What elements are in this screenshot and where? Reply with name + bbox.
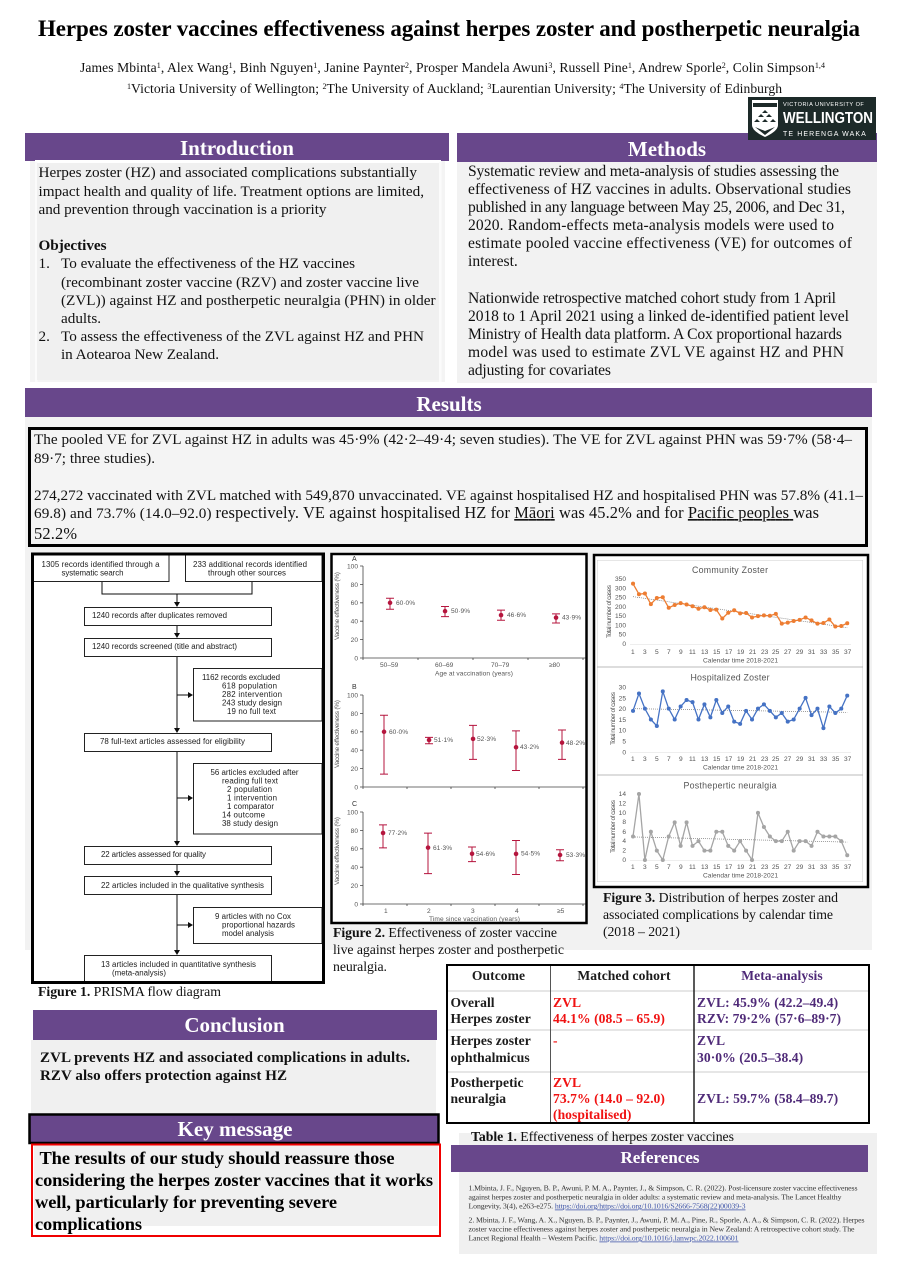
chart: postherpetic neuralgia: 8 — [622, 819, 626, 826]
chart: postherpetic neuralgia: 37 — [844, 864, 852, 871]
chart: community zoster: 350 — [615, 576, 626, 583]
text: methods: interest. — [468, 253, 518, 270]
icon: shield — [752, 100, 778, 137]
chart: community zoster: Calendar time 2018-2021 — [703, 658, 778, 664]
chart B: by time since vaccination — [334, 684, 586, 792]
text: methods: effectiveness of HZ vaccines in adults. Observational studies — [468, 181, 851, 198]
chart B: by time since vaccination: Vaccine effectiveness (%) — [334, 700, 341, 768]
chart: postherpetic neuralgia: 17 — [725, 864, 733, 871]
chart: community zoster: Total number of cases — [606, 584, 613, 638]
text: introduction: Herpes zoster (HZ) and associated complications substantially — [38, 164, 417, 181]
heading: results — [25, 388, 872, 417]
chart: hospitalized zoster: 15 — [619, 717, 626, 724]
text: methods: adjusting for covariates — [468, 362, 611, 379]
chart C: postherpetic neuralgia: 20 — [351, 883, 358, 890]
chart: community zoster: 300 — [615, 586, 626, 592]
affiliations: Victoria University of Wellington; — [131, 81, 322, 96]
text: introduction: Objectives — [38, 237, 107, 254]
chart C: postherpetic neuralgia: 60 — [351, 846, 358, 853]
chart A: by age at vaccination: 60·0% — [396, 600, 415, 607]
authors: , Prosper Mandela Awuni — [409, 60, 549, 75]
chart: community zoster: 100 — [615, 622, 626, 630]
caption: figure 3 — [603, 890, 838, 940]
panel: key message: well, particularly for preventing severe — [35, 1192, 337, 1212]
caption: figure 3: (2018 – 2021) — [603, 924, 680, 940]
text: introduction: To evaluate the effectiveness of the HZ vaccines — [61, 255, 355, 272]
authors: James Mbinta — [80, 60, 157, 75]
chart: postherpetic neuralgia: 31 — [808, 864, 816, 871]
figure 1: PRISMA flow diagram: 1 comparator — [227, 802, 274, 811]
text: conclusion: RZV also offers protection against HZ — [40, 1068, 287, 1084]
chart: hospitalized zoster: 5 — [655, 756, 659, 763]
chart: community zoster: 5 — [655, 649, 659, 656]
chart A: by age at vaccination: 43·9% — [562, 614, 581, 622]
chart: community zoster: 3 — [643, 649, 647, 656]
table: effectiveness of vaccines: RZV: 79·2% (57·6–89·7) — [697, 1011, 841, 1027]
chart: hospitalized zoster: 37 — [844, 756, 852, 763]
chart: postherpetic neuralgia: 27 — [784, 864, 792, 871]
logo: Victoria University of Wellington: WELLINGTON — [783, 110, 873, 127]
caption: figure 3: associated complications by calendar time — [603, 907, 833, 922]
panel: conclusion — [31, 1010, 437, 1114]
table: effectiveness of vaccines: Matched cohort — [577, 968, 671, 983]
authors: , Binh Nguyen — [233, 60, 313, 75]
figure 1: PRISMA flow diagram: 22 articles assessed for quality — [101, 850, 206, 859]
authors: 1 — [229, 61, 233, 70]
text: methods: estimate pooled vaccine effectiveness (VE) for outcomes of — [468, 235, 853, 252]
chart: postherpetic neuralgia: 29 — [796, 864, 804, 871]
chart A: by age at vaccination: 70–79 — [491, 662, 510, 669]
chart: hospitalized zoster: 35 — [832, 756, 840, 763]
logo: Victoria University of Wellington: TE HERENGA WAKA — [783, 131, 867, 138]
chart: postherpetic neuralgia: 12 — [619, 800, 626, 808]
chart: hospitalized zoster: 30 — [619, 684, 626, 692]
figure 2: vaccine effectiveness plots — [332, 554, 586, 923]
chart: postherpetic neuralgia: 35 — [832, 864, 840, 871]
chart: community zoster: 25 — [772, 649, 780, 656]
text: methods — [468, 163, 853, 379]
chart: postherpetic neuralgia: 6 — [622, 829, 626, 836]
chart: hospitalized zoster: 19 — [737, 756, 745, 763]
table: effectiveness of vaccines: Outcome — [472, 968, 525, 983]
chart: community zoster: 31 — [808, 649, 816, 656]
table: effectiveness of vaccines: ZVL — [553, 995, 581, 1010]
chart: community zoster: 200 — [615, 604, 626, 611]
text: introduction: To assess the effectiveness of the ZVL against HZ and PHN — [61, 328, 424, 345]
figure 1: PRISMA flow diagram: 282 intervention — [222, 690, 282, 699]
caption: figure 2: Figure 2. Effectiveness of zoster vaccine — [333, 925, 557, 940]
figure 1: PRISMA flow diagram: 78 full-text articles assessed for eligibility — [100, 737, 245, 746]
panel: results summary: 89·7; three studies). — [34, 450, 155, 467]
caption: figure 2 — [333, 925, 564, 974]
chart: postherpetic neuralgia: 19 — [737, 864, 745, 871]
chart: hospitalized zoster: 1 — [631, 756, 635, 763]
authors: 2 — [722, 61, 726, 70]
table: effectiveness of vaccines: Herpes zoster — [450, 1033, 531, 1048]
chart B: by time since vaccination: 100 — [347, 692, 358, 700]
chart: hospitalized zoster: 10 — [619, 728, 626, 734]
panel: results summary — [30, 428, 866, 546]
chart C: postherpetic neuralgia: 54·5% — [521, 850, 540, 858]
chart: postherpetic neuralgia: 0 — [622, 857, 626, 864]
affiliations: 1 — [127, 82, 131, 91]
figure 1: PRISMA flow diagram: 1240 records after duplicates removed — [92, 611, 227, 620]
chart B: by time since vaccination: 60·0% — [389, 729, 408, 736]
text: references: 1.Mbinta, J. F., Nguyen, B. P., Awuni, P. M. A., Paynter, J., & Simpson, C. R. (2022). Post-licensure zoster vaccine effectiveness — [468, 1184, 858, 1192]
figure 1: PRISMA flow diagram: 22 articles included in the qualitative synthesis — [101, 881, 264, 890]
text: introduction: 2. — [38, 328, 50, 345]
chart: hospitalized zoster: 0 — [622, 750, 626, 756]
chart: community zoster: 17 — [725, 649, 733, 656]
text: methods: Ministry of Health data platform. A Cox proportional hazards — [468, 326, 842, 343]
chart: community zoster: 9 — [679, 649, 683, 656]
chart A: by age at vaccination — [334, 556, 586, 678]
chart: community zoster: 35 — [832, 649, 840, 656]
chart B: by time since vaccination: 40 — [351, 748, 358, 754]
chart: community zoster: 7 — [667, 649, 671, 656]
authors: 3 — [548, 61, 552, 70]
authors: 1 — [313, 61, 317, 70]
chart B: by time since vaccination: 48·2% — [566, 740, 585, 747]
heading: introduction: Introduction — [180, 136, 294, 160]
chart: hospitalized zoster: 27 — [784, 756, 792, 763]
chart: postherpetic neuralgia: 25 — [772, 864, 780, 871]
table: effectiveness of vaccines: Meta-analysis — [741, 968, 823, 983]
panel: methods — [457, 133, 877, 383]
figure 1: PRISMA flow diagram: 1305 records identified through a — [42, 560, 160, 569]
chart B: by time since vaccination: 43·2% — [520, 744, 539, 751]
heading: conclusion: Conclusion — [184, 1013, 285, 1037]
table: effectiveness of vaccines: Overall — [450, 995, 495, 1010]
figure 1: PRISMA flow diagram: 14 outcome — [222, 810, 266, 820]
text: references: Longevity, 3(4), e263-e275. https://doi.org/https://doi.org/10.1016/S2666-7568(22)00039-3 — [468, 1202, 746, 1210]
panel: results summary: The pooled VE for ZVL against HZ in adults was 45·9% (42·2–49·4; seven studies). The VE for ZVL against PHN was 59·7% (58·4– — [34, 431, 852, 448]
heading: introduction — [25, 133, 449, 162]
chart A: by age at vaccination: 80 — [351, 582, 358, 589]
text: introduction: (recombinant zoster vaccine (RZV) and zoster vaccine live — [61, 274, 419, 291]
table: effectiveness of vaccines: ZVL — [697, 1033, 725, 1048]
chart: hospitalized zoster: 23 — [761, 756, 769, 763]
table: effectiveness of vaccines — [447, 965, 869, 1123]
authors: , Alex Wang — [161, 60, 229, 75]
title: Herpes zoster vaccines effectiveness against herpes zoster and postherpetic neuralgia — [38, 16, 860, 41]
authors: , Andrew Sporle — [632, 60, 722, 75]
heading: methods — [457, 133, 877, 162]
text: introduction: 1. — [38, 255, 50, 272]
table: effectiveness of vaccines: - — [553, 1033, 558, 1048]
heading: references — [451, 1145, 868, 1172]
chart B: by time since vaccination: 60 — [351, 729, 358, 736]
chart: hospitalized zoster: Calendar time 2018-2021 — [703, 764, 778, 772]
chart C: postherpetic neuralgia: 100 — [347, 810, 358, 816]
text: references: against herpes zoster and postherpetic neuralgia in older adults: a systematic review and meta-analysis. The Lancet Healthy — [468, 1192, 842, 1202]
chart B: by time since vaccination: 20 — [351, 766, 358, 773]
chart C: postherpetic neuralgia: Vaccine effectiveness (%) — [334, 817, 341, 885]
chart: community zoster — [606, 565, 852, 664]
figure 1: PRISMA flow diagram: 13 articles included in quantitative synthesis — [101, 960, 256, 969]
chart C: postherpetic neuralgia — [334, 801, 586, 923]
chart: postherpetic neuralgia: 4 — [622, 838, 626, 845]
heading: results: Results — [416, 392, 482, 416]
figure 1: PRISMA flow diagram: 38 study design — [222, 819, 278, 828]
heading: key message: Key message — [178, 1117, 292, 1141]
text: introduction: (ZVL)) against HZ and postherpetic neuralgia (PHN) in older — [61, 292, 436, 309]
chart A: by age at vaccination: Vaccine effectiveness (%) — [334, 572, 341, 640]
chart C: postherpetic neuralgia: 4 — [515, 908, 519, 915]
affiliations: Laurentian University; — [491, 81, 619, 96]
chart: postherpetic neuralgia: 10 — [619, 810, 626, 817]
chart A: by age at vaccination: Age at vaccination (years) — [435, 670, 513, 678]
authors: , Janine Paynter — [317, 60, 405, 75]
chart: hospitalized zoster: 33 — [820, 756, 828, 763]
figure 1: PRISMA flow diagram: through other sources — [208, 568, 286, 578]
caption: figure 2: live against herpes zoster and postherpetic — [333, 942, 564, 957]
chart C: postherpetic neuralgia: 0 — [354, 902, 358, 908]
chart: community zoster: 29 — [796, 649, 804, 656]
chart: postherpetic neuralgia: Total number of cases — [610, 799, 617, 853]
figure 1: PRISMA flow diagram: 56 articles excluded after — [210, 768, 299, 777]
caption: figure 1: Figure 1. PRISMA flow diagram — [38, 984, 221, 999]
heading: conclusion — [33, 1010, 437, 1040]
table: effectiveness of vaccines: neuralgia — [450, 1091, 506, 1106]
chart: postherpetic neuralgia: 23 — [761, 864, 769, 871]
figure 1: PRISMA flow diagram: 1162 records excluded — [202, 673, 280, 682]
chart: postherpetic neuralgia: 1 — [631, 864, 635, 871]
chart C: postherpetic neuralgia: 77·2% — [388, 830, 407, 837]
chart: community zoster: 150 — [615, 613, 626, 620]
text: introduction: impact health and quality of life. Treatment options are limited, — [38, 183, 424, 200]
text: conclusion: ZVL prevents HZ and associated complications in adults. — [40, 1050, 410, 1066]
affiliations: The University of Auckland; — [327, 81, 487, 96]
table: effectiveness of vaccines: ZVL: 59.7% (58.4–89.7) — [697, 1091, 838, 1107]
chart B: by time since vaccination: 80 — [351, 711, 358, 718]
chart C: postherpetic neuralgia: 61·3% — [433, 845, 452, 852]
authors: , Colin Simpson — [726, 60, 815, 75]
chart B: by time since vaccination: 51·1% — [434, 737, 453, 744]
chart: hospitalized zoster: 9 — [679, 756, 683, 763]
heading: references: References — [621, 1148, 700, 1167]
text: methods: model was used to estimate ZVL VE against HZ and PHN — [468, 344, 844, 361]
table: effectiveness of vaccines: Postherpetic — [450, 1075, 524, 1090]
chart: postherpetic neuralgia: 14 — [619, 791, 626, 798]
chart: hospitalized zoster: 17 — [725, 756, 733, 763]
chart C: postherpetic neuralgia: 2 — [427, 908, 431, 915]
panel: key message: considering the herpes zoster vaccines that it works — [35, 1170, 433, 1190]
text: references — [468, 1184, 864, 1242]
chart: hospitalized zoster: 5 — [622, 738, 626, 746]
affiliations: The University of Edinburgh — [623, 81, 782, 96]
affiliations: 3 — [487, 82, 491, 91]
text: references: zoster vaccine effectiveness against herpes zoster and postherpetic neuralgia in New Zealand: A retrospective cohort study. The — [468, 1224, 855, 1234]
table: effectiveness of vaccines: ophthalmicus — [450, 1050, 530, 1065]
panel: key message: complications — [35, 1214, 142, 1234]
text: methods: 2018 to 1 April 2021 using a linked de-identified patient level — [468, 308, 850, 325]
chart A: by age at vaccination: 60 — [351, 600, 358, 607]
chart A: by age at vaccination: 0 — [354, 656, 358, 662]
chart C: postherpetic neuralgia: 54·6% — [476, 851, 495, 858]
chart: community zoster: 37 — [844, 649, 852, 656]
figure 1: PRISMA flow diagram: systematic search — [62, 568, 124, 578]
affiliations: 4 — [619, 82, 623, 91]
logo: Victoria University of Wellington — [748, 97, 876, 140]
authors: 2 — [405, 61, 409, 70]
chart: postherpetic neuralgia: 21 — [749, 864, 757, 871]
panel: results summary: 274,272 vaccinated with ZVL matched with 549,870 unvaccinated. VE against hospitalised HZ and hospitalised PHN was 57.8% (41.1– — [34, 487, 863, 504]
chart A: by age at vaccination: 20 — [351, 637, 358, 644]
table: effectiveness of vaccines: 73.7% (14.0 – 92.0) — [553, 1091, 665, 1107]
chart C: postherpetic neuralgia: 53·3% — [566, 852, 585, 859]
chart: hospitalized zoster: 20 — [619, 706, 626, 713]
caption: table 1: Table 1. Effectiveness of herpes zoster vaccines — [471, 1129, 734, 1144]
chart A: by age at vaccination: 60–69 — [435, 662, 454, 669]
text: introduction: adults. — [61, 310, 101, 327]
chart: community zoster: 0 — [622, 641, 626, 648]
figure 1: PRISMA flow diagram: 243 study design — [222, 698, 282, 708]
chart C: postherpetic neuralgia: Time since vaccination (years) — [429, 916, 520, 923]
chart B: by time since vaccination: B — [352, 684, 357, 691]
chart C: postherpetic neuralgia: 40 — [351, 864, 358, 872]
text: methods: Systematic review and meta-analysis of studies assessing the — [468, 163, 839, 180]
heading: key message — [30, 1114, 438, 1143]
text: conclusion — [40, 1050, 410, 1084]
chart: community zoster: Community Zoster — [692, 565, 768, 575]
figure 1: PRISMA flow diagram: 19 no full text — [227, 707, 277, 716]
chart C: postherpetic neuralgia: 80 — [351, 828, 358, 835]
logo: Victoria University of Wellington: VICTORIA UNIVERSITY OF — [783, 102, 864, 108]
text: introduction — [38, 164, 436, 363]
chart: community zoster: 1 — [631, 649, 635, 656]
chart A: by age at vaccination: 46·6% — [507, 612, 526, 619]
chart: hospitalized zoster: Total number of cases — [610, 691, 617, 745]
chart: community zoster: 19 — [737, 649, 745, 656]
chart: hospitalized zoster: 13 — [701, 756, 709, 763]
text: introduction: and prevention through vaccination is a priority — [38, 201, 327, 218]
chart B: by time since vaccination: 0 — [354, 784, 358, 792]
chart: community zoster: 27 — [784, 649, 792, 656]
chart: hospitalized zoster: 7 — [667, 756, 671, 763]
chart: postherpetic neuralgia: 2 — [622, 848, 626, 854]
chart: postherpetic neuralgia: Posthepertic neuralgia — [684, 780, 777, 790]
chart: postherpetic neuralgia: 3 — [643, 864, 647, 871]
text: references: Lancet Regional Health – Western Pacific. https://doi.org/10.1016/j.lanwpc.2022.100601 — [468, 1234, 739, 1242]
chart: community zoster: 23 — [761, 649, 769, 656]
chart: postherpetic neuralgia: 5 — [655, 864, 659, 871]
background: results area — [25, 416, 872, 950]
table: effectiveness of vaccines: (hospitalised) — [553, 1107, 632, 1123]
text: methods: Nationwide retrospective matched cohort study from 1 April — [468, 290, 837, 307]
figure 1: PRISMA flow diagram: model analysis — [222, 929, 274, 938]
chart A: by age at vaccination: 50·9% — [451, 608, 470, 615]
table: effectiveness of vaccines: 44.1% (08.5 – 65.9) — [553, 1011, 665, 1027]
chart: postherpetic neuralgia: 11 — [689, 864, 696, 871]
panel: key message — [32, 1144, 440, 1236]
chart: postherpetic neuralgia: 7 — [667, 864, 671, 871]
text: methods: 2020. Random-effects meta-analysis models were used to — [468, 217, 834, 234]
chart: hospitalized zoster: 15 — [713, 756, 721, 763]
table: effectiveness of vaccines: ZVL — [553, 1075, 581, 1090]
authors: 1 — [628, 61, 632, 70]
figure 1: PRISMA flow diagram: 9 articles with no Cox — [215, 912, 291, 921]
panel: results summary: 52.2% — [34, 524, 77, 543]
authors: 1 — [157, 61, 161, 70]
chart C: postherpetic neuralgia: 3 — [471, 908, 475, 915]
chart: postherpetic neuralgia: 9 — [679, 864, 683, 871]
chart: hospitalized zoster: Hospitalized Zoster — [690, 672, 770, 682]
figure 1: PRISMA flow diagram: 1240 records screened (title and abstract) — [92, 642, 237, 651]
chart: community zoster: 11 — [689, 649, 696, 656]
figure 1: PRISMA flow diagram: (meta-analysis) — [112, 968, 166, 978]
chart A: by age at vaccination: 100 — [347, 564, 358, 570]
chart A: by age at vaccination: 40 — [351, 618, 358, 626]
chart: hospitalized zoster: 11 — [689, 756, 696, 763]
chart: postherpetic neuralgia: 15 — [713, 864, 721, 871]
caption: figure 3: Figure 3. Distribution of herpes zoster and — [603, 890, 838, 905]
chart C: postherpetic neuralgia: C — [352, 801, 357, 808]
authors: 1,4 — [815, 61, 825, 70]
chart: community zoster: 33 — [820, 649, 828, 656]
chart: hospitalized zoster: 31 — [808, 756, 816, 763]
text: introduction: in Aotearoa New Zealand. — [61, 346, 219, 363]
chart C: postherpetic neuralgia: ≥5 — [557, 908, 565, 915]
chart: hospitalized zoster: 21 — [749, 756, 757, 763]
chart B: by time since vaccination: 52·3% — [477, 736, 496, 743]
figure 1: PRISMA flow diagram: 618 population — [222, 682, 277, 690]
figure 3: distribution by calendar time — [594, 555, 868, 887]
caption: figure 2: neuralgia. — [333, 959, 387, 974]
panel: references — [451, 1129, 877, 1254]
chart: postherpetic neuralgia: 33 — [820, 864, 828, 871]
figure 1: PRISMA flow diagram: 233 additional records identified — [193, 560, 307, 569]
chart: community zoster: 13 — [701, 649, 709, 656]
authors: , Russell Pine — [552, 60, 628, 75]
chart: hospitalized zoster: 25 — [772, 756, 780, 763]
text: methods: published in any language between May 25, 2006, and Dec 31, — [468, 199, 845, 216]
chart: postherpetic neuralgia — [610, 780, 852, 880]
chart: hospitalized zoster: 29 — [796, 756, 804, 763]
panel: results summary: 69.8) and 73.7% (14.0–92.0) respectively. VE against hospitalised HZ for Māori was 45.2% and for Pacific peoples was — [34, 503, 819, 522]
figure 1: PRISMA flow diagram: reading full text — [222, 776, 279, 786]
text: references: 2. Mbinta, J. F., Wang, A. X., Nguyen, B. P., Paynter, J., Awuni, P. M. A., Pine, R., Sporle, A. A., & Simpson, C. R. (2022). Herpes — [468, 1216, 864, 1224]
figure 1: PRISMA flow diagram: 1 intervention — [227, 794, 277, 802]
chart: community zoster: 50 — [619, 632, 626, 638]
panel: introduction — [25, 133, 449, 382]
table: effectiveness of vaccines: ZVL: 45.9% (42.2–49.4) — [697, 995, 838, 1011]
table: effectiveness of vaccines: Herpes zoster — [450, 1011, 531, 1026]
chart: hospitalized zoster — [610, 672, 852, 772]
chart: hospitalized zoster: 25 — [619, 696, 626, 702]
chart A: by age at vaccination: ≥80 — [549, 662, 560, 669]
figure 1: PRISMA flow diagram — [32, 554, 324, 982]
figure 1: PRISMA flow diagram: 2 population — [227, 785, 272, 794]
panel: key message: The results of our study should reassure those — [40, 1148, 394, 1168]
chart: postherpetic neuralgia: Calendar time 2018-2021 — [703, 872, 778, 880]
affiliations: 2 — [323, 82, 327, 91]
chart C: postherpetic neuralgia: 1 — [384, 908, 388, 915]
table: effectiveness of vaccines: 30·0% (20.5–38.4) — [697, 1050, 803, 1066]
figure 1: PRISMA flow diagram: proportional hazards — [222, 920, 295, 930]
heading: methods: Methods — [628, 137, 706, 161]
chart: community zoster: 15 — [713, 649, 721, 656]
chart: community zoster: 21 — [749, 649, 757, 656]
chart: postherpetic neuralgia: 13 — [701, 864, 709, 871]
chart: hospitalized zoster: 3 — [643, 756, 647, 763]
chart A: by age at vaccination: A — [352, 556, 357, 563]
chart: community zoster: 250 — [615, 594, 626, 602]
chart A: by age at vaccination: 50–59 — [380, 662, 399, 669]
